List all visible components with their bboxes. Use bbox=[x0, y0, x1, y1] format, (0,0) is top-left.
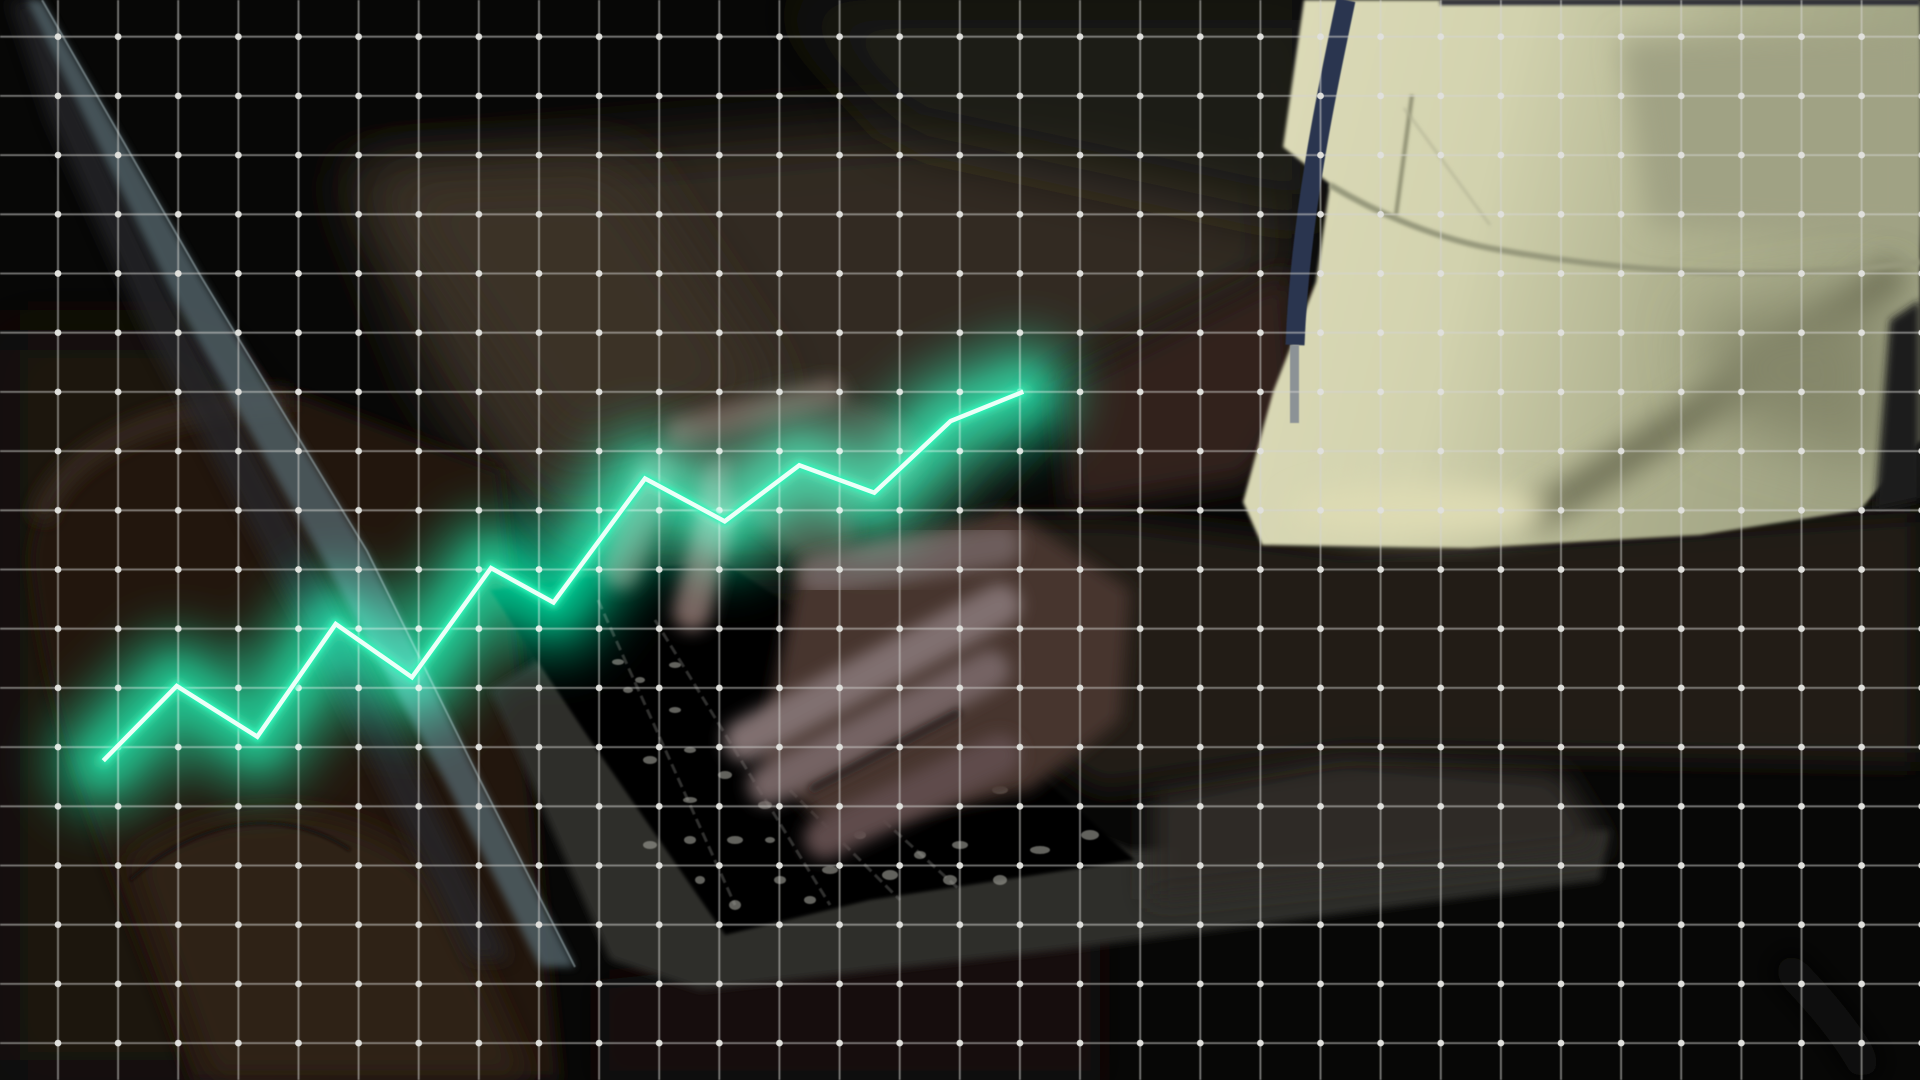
inner glow bbox=[103, 392, 1023, 761]
laptop screen edge bbox=[10, 0, 575, 967]
keyboard bbox=[490, 560, 1135, 935]
outer glow bbox=[103, 392, 1023, 761]
brown jacket on lap bbox=[30, 395, 560, 1080]
line chart: glowing growth line bbox=[103, 392, 1023, 761]
hoodie bbox=[1243, 0, 1920, 548]
upper hand bbox=[622, 392, 920, 612]
typing forearm bbox=[970, 512, 1920, 790]
hoodie cord bbox=[1290, 0, 1346, 423]
hoodie shading bbox=[1290, 0, 1920, 536]
laptop base bbox=[490, 640, 1610, 990]
left forearm behind bbox=[1060, 270, 1300, 510]
line core bbox=[103, 392, 1023, 761]
keyboard key rows bbox=[598, 600, 960, 905]
typing hand bbox=[745, 510, 1130, 838]
